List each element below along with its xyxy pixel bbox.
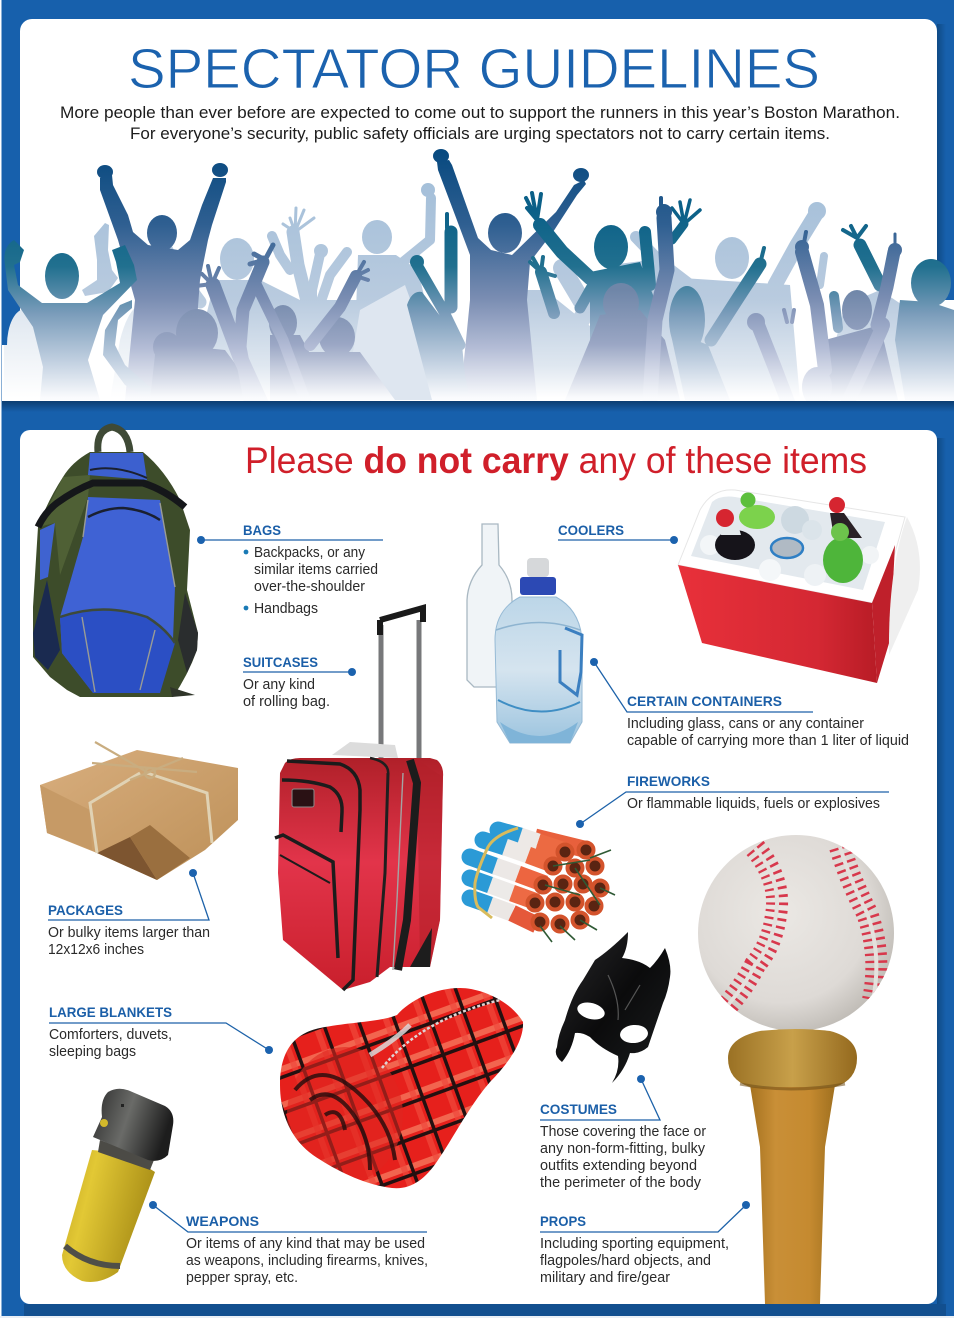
center-left overlapping figures xyxy=(150,305,395,400)
callout: costumes: the perimeter of the body xyxy=(540,1175,702,1191)
callout: certain containers: capable of carrying more than 1 liter of liquid xyxy=(627,733,909,749)
callout: certain containers xyxy=(590,658,909,749)
teal figures right xyxy=(526,193,954,400)
callout: certain containers: Including glass, cans or any container xyxy=(627,716,864,732)
photo: bat mask xyxy=(556,932,670,1083)
callout: fireworks: Or flammable liquids, fuels or explosives xyxy=(627,796,880,812)
photo: bottles xyxy=(467,524,582,743)
intro text: For everyone’s security, public safety officials are urging spectators not to carry certain items. xyxy=(130,124,830,143)
photo: cooler with drinks xyxy=(678,490,920,683)
photo: brown paper package xyxy=(40,742,238,880)
left front figure xyxy=(4,240,137,396)
callout: weapons: as weapons, including firearms, knives, xyxy=(186,1253,428,1269)
callout: packages: PACKAGES xyxy=(48,902,123,918)
callout: large blankets: Comforters, duvets, xyxy=(49,1027,172,1043)
callout: bags: BAGS xyxy=(243,522,281,538)
callout: bags xyxy=(197,522,383,617)
crowd silhouette illustration xyxy=(4,149,954,410)
callout: packages xyxy=(48,869,210,958)
panel: do not carry xyxy=(0,430,954,1318)
intro text: More people than ever before are expected to come out to support the runners in this year’s Boston Marathon. xyxy=(60,103,900,122)
callout: props xyxy=(540,1201,750,1286)
light back row xyxy=(4,183,910,400)
callout: costumes: COSTUMES xyxy=(540,1101,617,1117)
callout: suitcases: Or any kind xyxy=(243,677,315,693)
callout: fireworks: FIREWORKS xyxy=(627,773,710,789)
callout: props: Including sporting equipment, xyxy=(540,1236,729,1252)
callout: props: military and fire/gear xyxy=(540,1270,670,1286)
callout: suitcases: of rolling bag. xyxy=(243,694,330,710)
title: SPECTATOR GUIDELINES xyxy=(128,37,820,101)
intro text xyxy=(60,103,900,143)
panel: top header xyxy=(2,19,954,412)
callout: bags: similar items carried xyxy=(254,562,378,578)
photo: baseball bat xyxy=(728,1029,857,1304)
callout: props: PROPS xyxy=(540,1213,586,1229)
callout: large blankets: LARGE BLANKETS xyxy=(49,1004,172,1020)
heading: do not carry: Please do not carry any of these items xyxy=(245,440,867,481)
callout: coolers: COOLERS xyxy=(558,522,624,538)
front navy arms right xyxy=(747,308,890,396)
callout: weapons: Or items of any kind that may be used xyxy=(186,1236,425,1252)
callout: costumes: Those covering the face or xyxy=(540,1124,706,1140)
photo: pepper spray canister xyxy=(62,1089,173,1282)
callout: costumes: outfits extending beyond xyxy=(540,1158,697,1174)
callout: bags: Handbags xyxy=(254,601,318,617)
callout: large blankets xyxy=(49,1004,273,1060)
callout: packages: 12x12x6 inches xyxy=(48,942,144,958)
photo: baseball xyxy=(698,835,894,1031)
callout: certain containers: CERTAIN CONTAINERS xyxy=(627,693,782,709)
photo: backpack xyxy=(33,427,198,697)
callout: costumes: any non-form-fitting, bulky xyxy=(540,1141,706,1157)
big center figure xyxy=(433,149,589,400)
callout: large blankets: sleeping bags xyxy=(49,1044,136,1060)
callout: coolers xyxy=(558,522,678,544)
callout: suitcases xyxy=(243,654,356,710)
photo: fireworks bundle xyxy=(470,828,615,942)
callout: weapons: pepper spray, etc. xyxy=(186,1270,298,1286)
callout: fireworks xyxy=(576,773,889,828)
photo: rolled plaid blanket xyxy=(280,988,524,1188)
callout: weapons xyxy=(149,1201,428,1286)
callout: packages: Or bulky items larger than xyxy=(48,925,210,941)
callout: props: flagpoles/hard objects, and xyxy=(540,1253,711,1269)
callout: bags: Backpacks, or any xyxy=(254,545,366,561)
navy center-left figure xyxy=(97,163,232,400)
photo: rolling suitcase xyxy=(275,608,443,990)
callout: costumes xyxy=(540,1075,706,1191)
callout: suitcases: SUITCASES xyxy=(243,654,318,670)
callout: weapons: WEAPONS xyxy=(186,1213,259,1229)
callout: bags: over-the-shoulder xyxy=(254,579,365,595)
